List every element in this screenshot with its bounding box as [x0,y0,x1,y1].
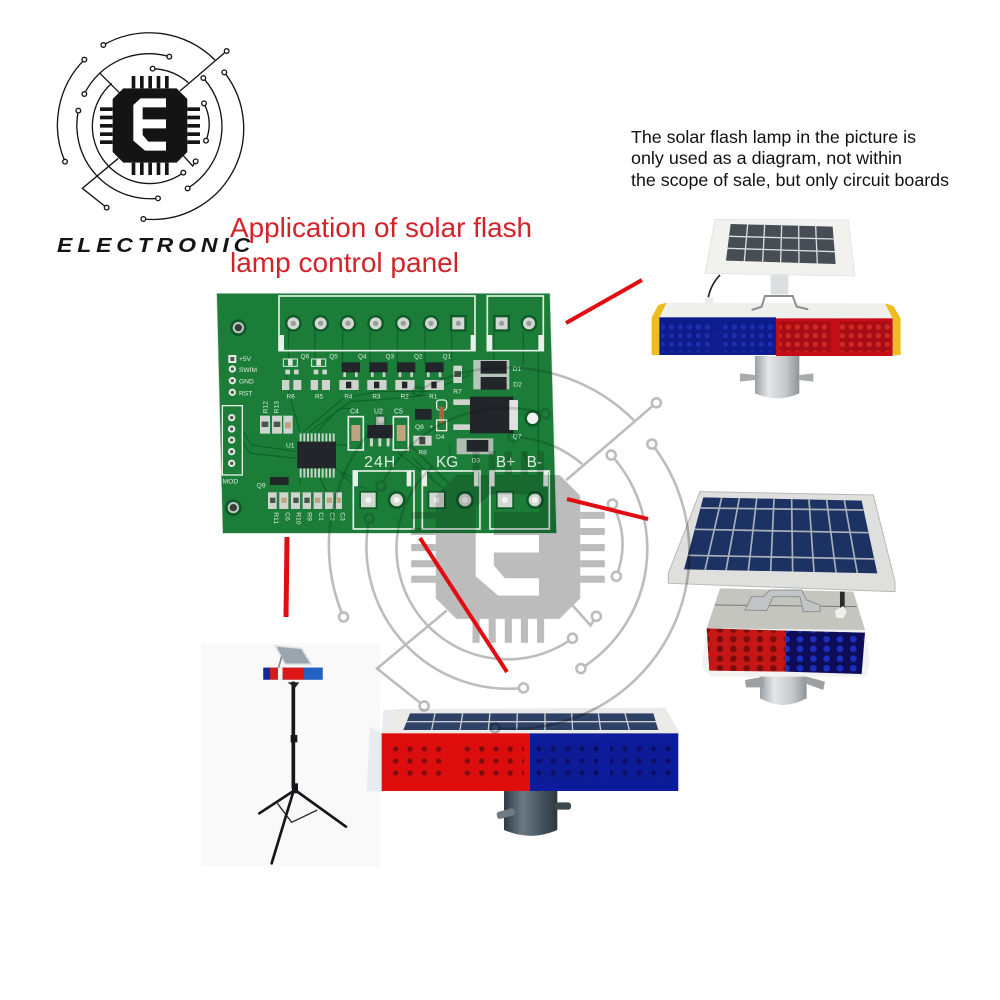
MOD header: MOD [223,479,238,486]
transistors and resistors Q1-Q6 R1-R6: R1 [429,393,438,400]
connector 24H: 24H [364,454,396,471]
watermark: large grey brand emblem [329,368,689,732]
header pins and labels: +5V [239,356,252,363]
transistors and resistors Q1-Q6 R1-R6: R3 [372,393,381,400]
Q9 and bottom resistor row: R11 [272,512,279,524]
U2 regulator and capacitors [348,409,408,450]
transistors and resistors Q1-Q6 R1-R6: Q4 [358,353,367,360]
red title: Application of solar flash [230,212,532,243]
diodes, R7 and regulator: R7 [453,388,462,395]
transistors and resistors Q1-Q6 R1-R6 [282,353,452,400]
diodes, R7 and regulator [413,360,522,464]
U2 regulator and capacitors: U2 [374,409,383,416]
photo: top right solar flash lamp [652,219,901,398]
disclaimer note: only used as a diagram, not within [631,148,902,168]
left component cluster R12 R13 C7 [260,401,293,434]
disclaimer note: The solar flash lamp in the picture is [631,127,916,147]
circuit board photo [217,293,557,533]
top connector J1 [279,296,476,351]
Q9 and bottom resistor row: R9 [306,512,313,521]
U2 regulator and capacitors: C5 [394,409,403,416]
connector B+ B-: B- [527,454,542,471]
Q9 and bottom resistor row: C6 [283,512,290,521]
transistors and resistors Q1-Q6 R1-R6: R6 [287,393,295,400]
U1 microcontroller: U1 [286,443,295,450]
connector B+ B- [490,454,549,529]
copper traces [242,328,538,492]
red pointer line to bottom lamp [420,538,507,672]
Q9 and bottom resistor row: R10 [295,512,302,525]
MOD header [222,406,242,486]
diodes, R7 and regulator: D2 [513,382,522,389]
Q9 and bottom resistor row: C2 [328,512,335,521]
left component cluster R12 R13 C7: R12 [262,401,269,413]
U2 regulator and capacitors: C4 [350,409,359,416]
transistors and resistors Q1-Q6 R1-R6: Q5 [329,353,338,360]
red pointer line to top right lamp [566,280,642,323]
mounting holes [225,319,541,516]
photo: bottom solar flash lamp [367,708,680,836]
header pins and labels: SWIM [239,367,257,374]
connector KG: KG [436,454,458,471]
diodes, R7 and regulator: D4 [436,434,445,441]
transistors and resistors Q1-Q6 R1-R6: R2 [401,393,409,400]
transistors and resistors Q1-Q6 R1-R6: R5 [315,393,324,400]
red title [230,212,532,278]
red pointer line to right lamp [567,499,648,519]
photo: tripod-mounted solar flash lamp [201,643,380,867]
transistors and resistors Q1-Q6 R1-R6: Q2 [414,353,423,360]
Q9 and bottom resistor row: C1 [317,512,324,521]
diodes, R7 and regulator: Q7 [513,433,522,440]
brand wordmark: ELECTRONIC [57,233,251,257]
disclaimer note: the scope of sale, but only circuit boards [631,170,949,190]
diodes, R7 and regulator: + [429,424,433,431]
diodes, R7 and regulator: R8 [418,449,427,456]
top connector J2 [487,296,543,351]
diodes, R7 and regulator: D3 [472,457,480,464]
left component cluster R12 R13 C7: R13 [274,401,281,413]
red title: lamp control panel [230,247,459,278]
header pins and labels: GND [239,379,254,386]
U1 microcontroller [286,433,336,478]
diodes, R7 and regulator: Q8 [415,424,424,431]
transistors and resistors Q1-Q6 R1-R6: R4 [344,393,353,400]
transistors and resistors Q1-Q6 R1-R6: Q1 [443,353,452,360]
connector KG [422,454,480,529]
brand logo emblem [57,33,244,221]
Q9 and bottom resistor row: C3 [339,512,346,521]
connector B+ B-: B+ [496,454,515,471]
disclaimer note [631,127,949,190]
header pins and labels: RST [239,390,252,397]
connector 24H [353,454,414,529]
board substrate [217,293,557,533]
red pointer line to tripod lamp [286,537,287,617]
transistors and resistors Q1-Q6 R1-R6: Q3 [386,353,395,360]
transistors and resistors Q1-Q6 R1-R6: Q6 [301,353,310,360]
Q9 and bottom resistor row: Q9 [257,483,266,490]
photo: right solar flash lamp [668,492,895,705]
diodes, R7 and regulator: D1 [513,366,521,373]
Q9 and bottom resistor row [257,477,346,525]
header pins and labels [228,355,257,397]
